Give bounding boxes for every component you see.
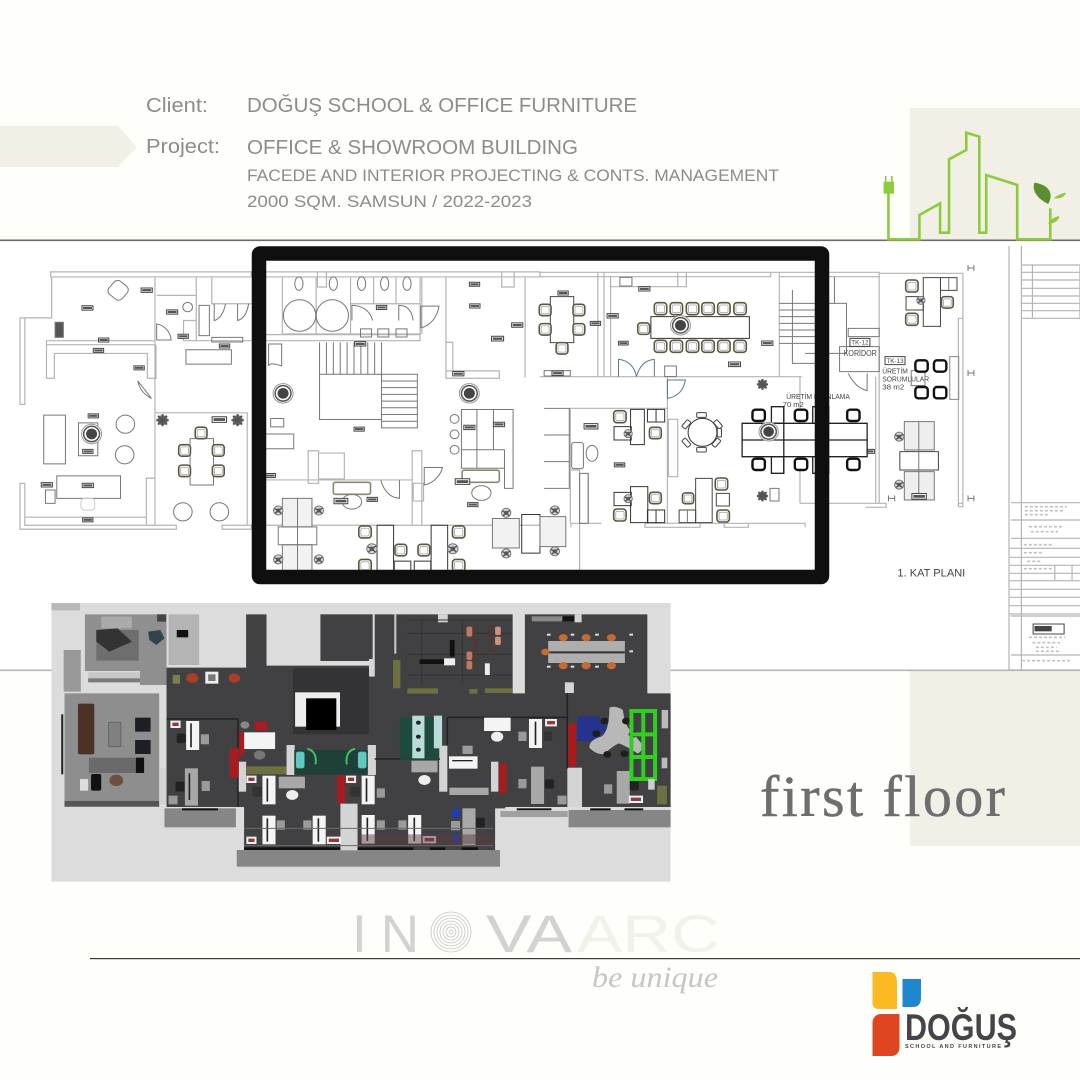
teal lounge [247, 716, 442, 775]
green shelving [631, 711, 655, 779]
left wing walls [20, 272, 251, 529]
icon: green city with plug and leaves [884, 133, 1066, 239]
desk accents and chairs [176, 722, 639, 842]
client name: DOĞUŞ SCHOOL & OFFICE FURNITURE [247, 94, 637, 117]
logo tagline: be unique [592, 961, 718, 994]
blue chairs [452, 809, 460, 842]
right wing furniture [900, 278, 959, 500]
white plan sheet [0, 241, 1080, 670]
main staircase [320, 342, 417, 428]
logo subtitle: SCHOOL AND FURNITURE [905, 1044, 1001, 1050]
project name: OFFICE & SHOWROOM BUILDING [247, 137, 578, 159]
3D rendered floor plan [51, 603, 671, 882]
room label: corridor [844, 338, 877, 358]
grid axis markers [888, 265, 974, 501]
room label: production supervisors: SORUMLULAR [882, 375, 929, 384]
red accent squares [171, 720, 642, 843]
logo mark: yellow [872, 972, 897, 1009]
red storage units [230, 722, 576, 803]
long office area and planters [393, 620, 513, 694]
footer rule [90, 958, 1080, 959]
drawing title block [1009, 246, 1080, 670]
plan highlight frame [259, 254, 822, 577]
right stair core [779, 277, 879, 391]
project scope: FACEDE AND INTERIOR PROJECTING & CONTS. MANAGEMENT [247, 166, 779, 185]
central core walls [251, 272, 540, 525]
room label: production supervisors [882, 357, 929, 392]
room label: production supervisors: TK-13 [886, 358, 904, 365]
room label: production supervisors: ÜRETİM [882, 367, 908, 376]
project information text [146, 94, 779, 211]
room label: area: 70 m2 [783, 400, 804, 409]
logo wordmark: DOĞUŞ [905, 1007, 1017, 1048]
floor plan drawing: left half [20, 272, 540, 573]
room label: corridor: KORİDOR [844, 348, 877, 358]
white structural walls [159, 614, 582, 850]
logo word: IN: IN [352, 905, 419, 964]
production planning desks [742, 407, 867, 473]
inova arc logo [352, 905, 720, 964]
entry decor [173, 672, 240, 684]
offices: desks and shelving [540, 408, 779, 547]
room label: production planning: ÜRETİM PLANLAMA [786, 392, 850, 401]
round white tables [286, 732, 503, 800]
work desks: grey [185, 761, 630, 845]
small grey cabinets [169, 732, 612, 830]
room label: corridor: TK-12 [851, 340, 869, 347]
central stair block [293, 668, 369, 734]
client label: Client: [146, 95, 208, 117]
main dark floor [167, 614, 671, 850]
logo word: ARC: ARC [577, 905, 720, 964]
room label: production supervisors: 38 m2 [882, 383, 904, 392]
logo fingerprint [431, 912, 471, 952]
meeting room table [532, 616, 633, 669]
first floor heading: first floor [760, 764, 1005, 829]
balconies and ledges [164, 808, 236, 827]
cream panel: lower right [910, 670, 1080, 846]
showroom rooms in grey [61, 614, 199, 807]
central furniture [265, 409, 540, 573]
core and right wing walls [540, 272, 963, 571]
trefoil workstation [589, 707, 643, 754]
arrow banner [0, 126, 137, 167]
work desks: white [186, 718, 542, 844]
project size and date: 2000 SQM. SAMSUN / 2022-2023 [247, 192, 532, 211]
project label: Project: [146, 136, 220, 158]
plan title: 1. KAT PLANI [897, 567, 965, 579]
left wing furniture [44, 279, 249, 521]
logo mark: blue [902, 979, 921, 1007]
logo word: VA: VA [486, 905, 573, 964]
toilets and round columns [269, 277, 439, 366]
cream panel: top right [910, 108, 1080, 242]
dogus logo [872, 972, 1017, 1056]
round table chairs [682, 413, 723, 452]
meeting room table and doors [544, 277, 749, 398]
logo mark: red [872, 1014, 900, 1056]
floor plan drawing: right half [539, 246, 1080, 670]
